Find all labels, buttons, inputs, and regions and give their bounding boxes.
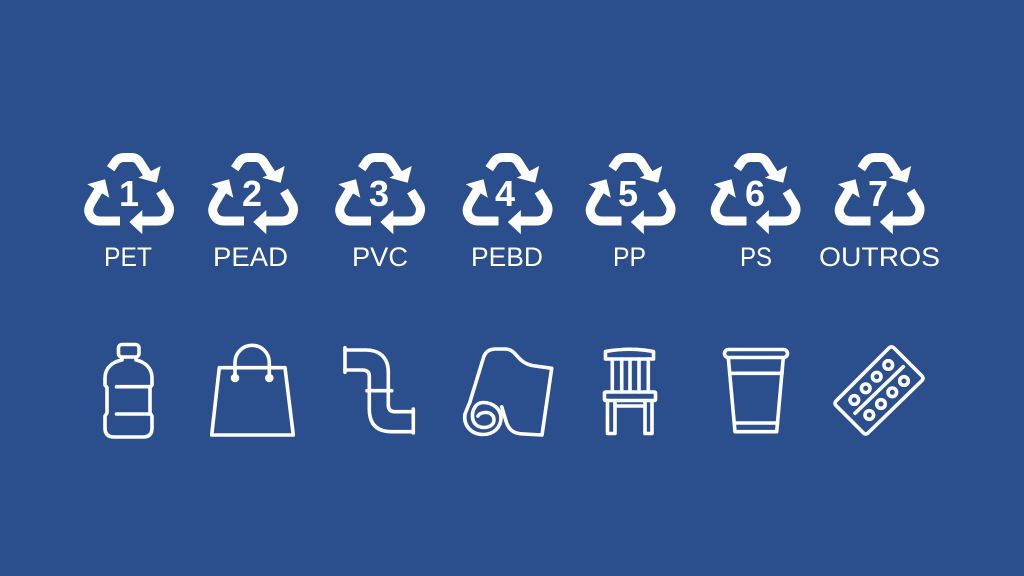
- recycling symbol 2: 2: [242, 173, 262, 214]
- label: PEBD: PEBD: [471, 242, 543, 272]
- icon: blister pack: [835, 347, 923, 434]
- recycling symbol 7: [838, 158, 920, 234]
- recycling symbol 1: 1: [119, 173, 139, 214]
- recycling symbol 4: 4: [495, 173, 515, 214]
- icon: pipe: [345, 348, 413, 433]
- label: PET: PET: [104, 242, 152, 272]
- label: PVC: PVC: [352, 242, 408, 272]
- recycling symbol 1: [87, 158, 170, 234]
- recycling symbol 6: [714, 158, 796, 234]
- label: PP: PP: [613, 242, 646, 272]
- icon: shopping bag: [212, 345, 293, 435]
- recycling symbol 5: [589, 158, 671, 234]
- recycling symbol 7: 7: [868, 173, 888, 214]
- recycling symbol 2: [211, 158, 294, 234]
- icon: bottle: [105, 344, 152, 437]
- label: PS: PS: [740, 242, 772, 272]
- label: PEAD: PEAD: [213, 242, 288, 272]
- icon: plastic cup: [724, 350, 788, 432]
- recycling symbol 3: 3: [369, 173, 389, 214]
- recycling symbol 3: [338, 158, 420, 234]
- recycling symbol 4: [466, 158, 548, 234]
- icon: chair: [604, 349, 656, 434]
- icon: rolled carpet: [465, 349, 552, 435]
- recycling symbol 5: 5: [618, 173, 638, 214]
- label: OUTROS: OUTROS: [819, 242, 940, 272]
- recycling symbol 6: 6: [745, 173, 765, 214]
